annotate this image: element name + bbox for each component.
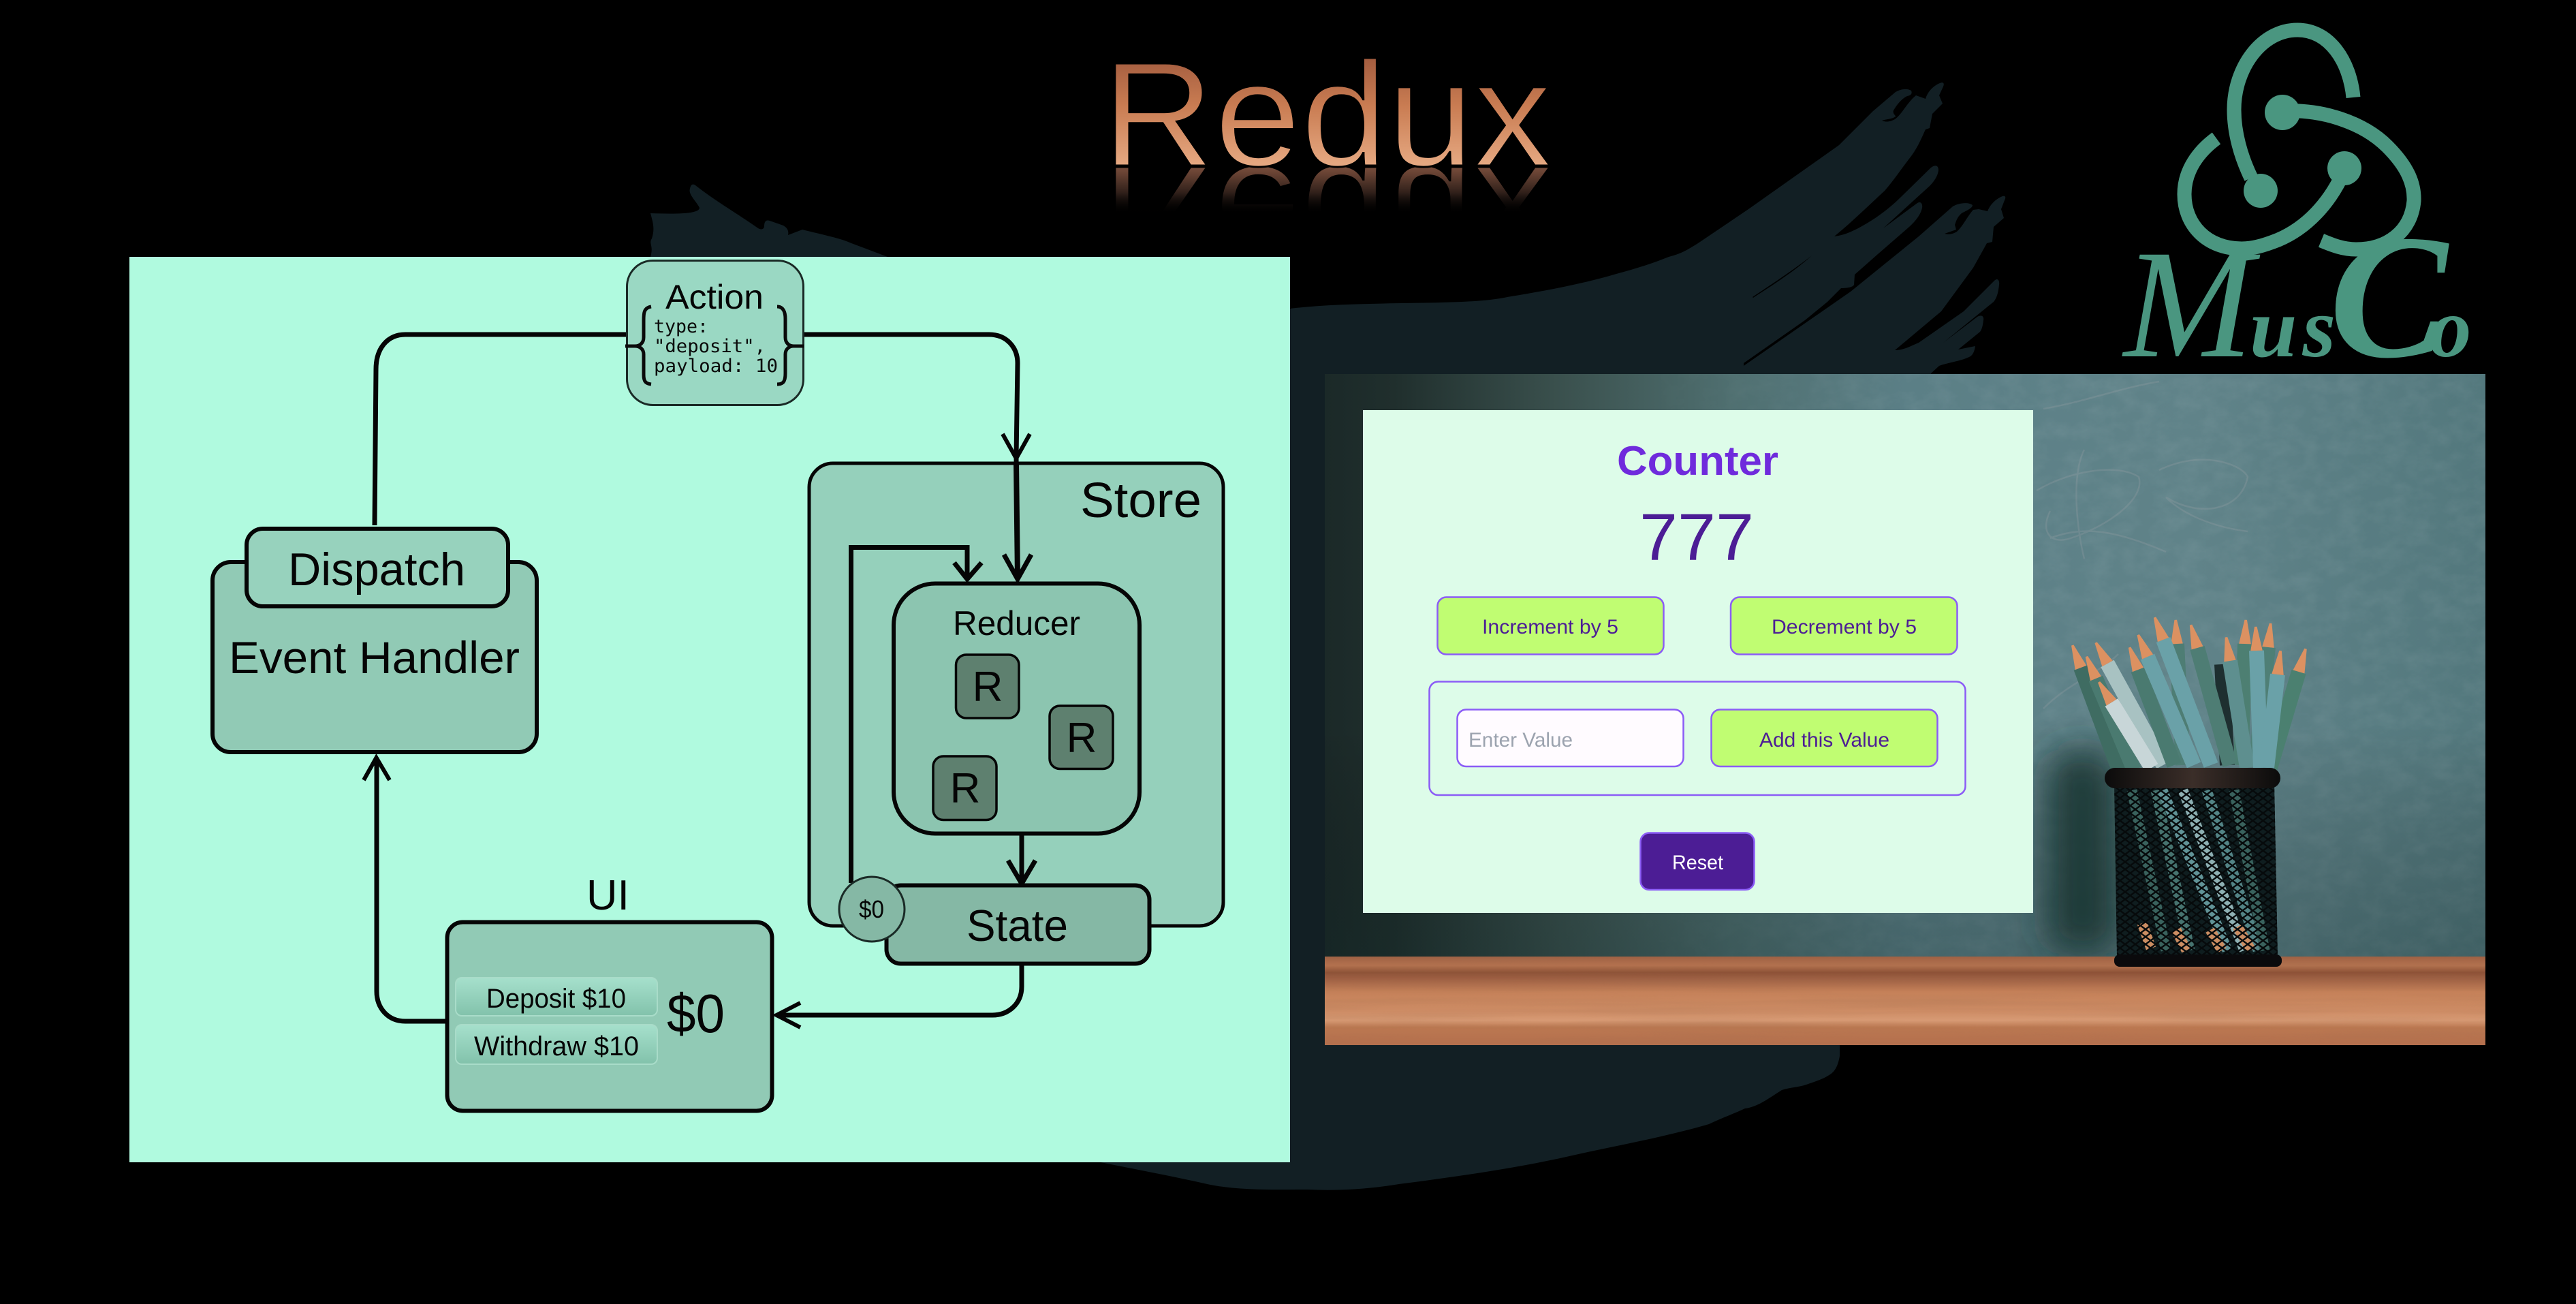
balance: $0 — [667, 983, 725, 1044]
arrow: state feedback loop — [851, 548, 981, 883]
deposit button: Deposit $10 — [486, 984, 626, 1014]
panel: redux data flow diagram — [129, 257, 1290, 1162]
ui label: UI — [586, 872, 629, 919]
panel background — [129, 257, 1290, 1162]
decrement button — [1731, 597, 1958, 654]
braces — [625, 307, 804, 384]
brush slit — [1753, 255, 1812, 298]
panel: event handler — [213, 529, 537, 752]
increment button — [1437, 597, 1663, 654]
decorative brush stroke — [650, 82, 2005, 1190]
title text: Redux — [1102, 32, 1552, 198]
holder shadow — [2047, 749, 2118, 954]
action heading: Action — [665, 278, 764, 316]
wood grain — [1325, 957, 2485, 1045]
photo: chalkboard with pencils — [1325, 374, 2485, 1045]
dispatch box — [247, 529, 508, 606]
logo: MusCo — [2122, 30, 2471, 395]
value input — [1458, 710, 1684, 766]
event handler label: Event Handler — [229, 632, 520, 683]
counter value: 777 — [1639, 500, 1754, 574]
value input: Enter Value — [1468, 729, 1573, 751]
panel: counter card — [1363, 410, 2033, 913]
panel: ui — [447, 922, 772, 1111]
reducer box 2 — [1050, 706, 1113, 769]
reducer box 1: R — [973, 664, 1003, 711]
chalk scribbles — [2037, 382, 2248, 709]
store heading: Store — [1080, 474, 1201, 528]
reducer box 2: R — [1067, 715, 1097, 762]
logo wordmark: us — [2250, 281, 2341, 375]
wall texture — [1914, 380, 2485, 932]
action code: payload: 10 — [654, 356, 778, 377]
badge: state value: $0 — [859, 895, 884, 923]
wall lower shade — [1325, 374, 2485, 960]
holder base — [2114, 954, 2282, 967]
reducer box 3 — [933, 756, 996, 820]
title reflection: Redux — [1102, 135, 1552, 300]
add button — [1711, 710, 1937, 766]
panel: reducer — [894, 583, 1140, 834]
pencils through mesh — [2132, 790, 2265, 950]
action code — [654, 316, 778, 377]
table top — [1325, 957, 2485, 1045]
box: state: State — [967, 901, 1068, 950]
arrow: ui to event handler — [364, 758, 446, 1021]
panel: action — [625, 260, 804, 405]
reducer box 1 — [956, 655, 1019, 718]
arrow: action to store — [804, 335, 1030, 579]
custom value group — [1429, 681, 1966, 795]
arrow: state to ui — [776, 965, 1022, 1027]
reducer box 3: R — [950, 765, 980, 812]
logo wordmark: C — [2329, 199, 2451, 395]
logo wordmark: M — [2122, 219, 2261, 390]
arrow: reducer to state — [1008, 835, 1035, 884]
logo wordmark: o — [2429, 281, 2471, 375]
wall — [1325, 374, 2485, 960]
pencils — [2081, 640, 2299, 770]
withdraw button — [456, 1025, 657, 1064]
badge: state value — [839, 877, 905, 942]
reset button — [1640, 833, 1755, 890]
icon: redux knot — [2184, 30, 2414, 249]
add button: Add this Value — [1759, 729, 1889, 751]
panel: store — [776, 463, 1223, 1027]
reset button: Reset — [1672, 852, 1724, 874]
action code: type: — [654, 316, 708, 337]
mesh lattice — [2114, 783, 2278, 956]
counter heading: Counter — [1617, 438, 1778, 484]
decrement button: Decrement by 5 — [1772, 616, 1917, 638]
increment button: Increment by 5 — [1482, 616, 1618, 638]
dispatch box: Dispatch — [288, 544, 465, 595]
pencil holder and pencils — [2081, 640, 2299, 967]
deposit button — [456, 978, 657, 1016]
holder rim — [2105, 768, 2280, 788]
reducer heading: Reducer — [953, 604, 1080, 642]
title: Redux — [1102, 32, 1552, 300]
arrow: dispatch to action — [375, 335, 627, 525]
action code: "deposit", — [654, 336, 766, 357]
mesh body — [2114, 783, 2278, 956]
box: state — [887, 886, 1150, 963]
withdraw button: Withdraw $10 — [474, 1031, 639, 1061]
arrow: store into reducer — [1004, 463, 1031, 579]
